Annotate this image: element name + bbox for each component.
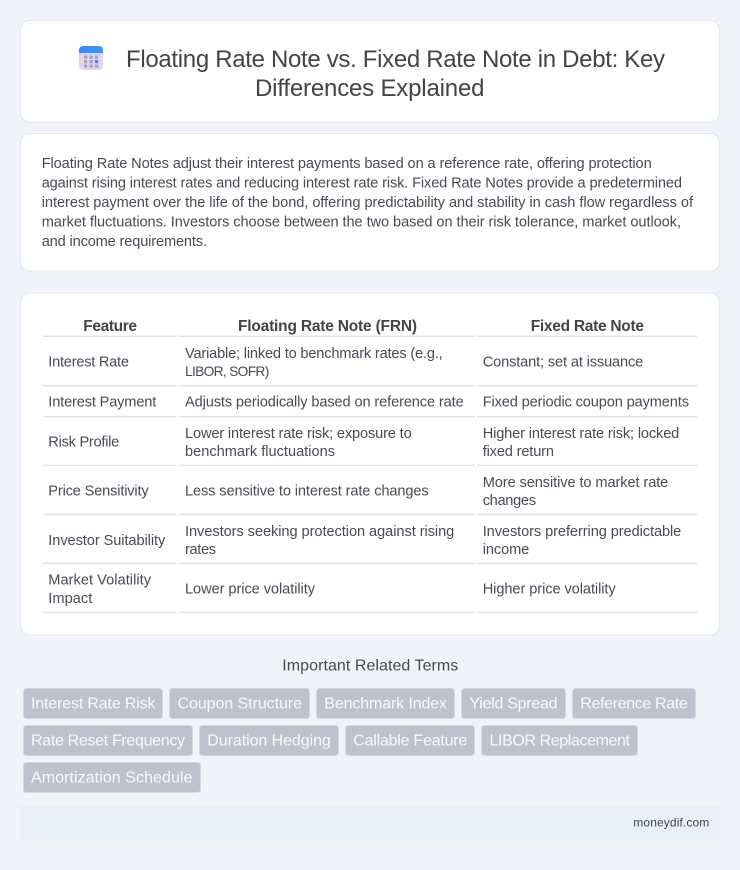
row: investor suitability: Investor Suitability: [48, 533, 166, 549]
row: interest rate: LIBOR, SOFR): [185, 364, 269, 379]
title: [126, 46, 665, 102]
footer source text: moneydif.com: [633, 816, 709, 830]
tag: reference rate: [572, 688, 696, 718]
row: price sensitivity: More sensitive to market rate: [483, 475, 668, 491]
icon: calendar: [79, 46, 103, 70]
panel: title header: [20, 20, 720, 122]
row: interest rate: Constant; set at issuance: [483, 355, 643, 371]
tag: yield spread: [462, 688, 566, 718]
tag: reference rate: Reference Rate: [580, 696, 688, 713]
footer bar: [20, 806, 720, 840]
tag: coupon structure: [170, 688, 310, 718]
tag: benchmark index: Benchmark Index: [324, 696, 447, 713]
row: interest payment: Interest Payment: [48, 395, 156, 411]
row: price sensitivity: [48, 475, 668, 509]
row: interest rate: Interest Rate: [48, 355, 129, 371]
tag: rate reset frequency: [24, 726, 192, 756]
row: market volatility impact: Lower price volatility: [185, 582, 316, 598]
row: investor suitability: Investors seeking protection against rising: [185, 524, 454, 540]
row: risk profile: Lower interest rate risk; exposure to: [185, 426, 412, 442]
title: Floating Rate Note vs. Fixed Rate Note in Debt: Key: [126, 46, 665, 73]
tag: libor replacement: LIBOR Replacement: [490, 733, 631, 750]
row: market volatility impact: Higher price volatility: [483, 582, 616, 598]
row: investor suitability: rates: [185, 542, 216, 558]
row: interest rate: Variable; linked to benchmark rates (e.g.,: [185, 346, 443, 362]
row: price sensitivity: Less sensitive to interest rate changes: [185, 484, 429, 500]
row: risk profile: Risk Profile: [48, 435, 119, 451]
row: interest payment: Fixed periodic coupon payments: [483, 395, 689, 411]
tag: benchmark index: [316, 688, 454, 718]
table header row: Fixed Rate Note: [531, 318, 644, 335]
intro text block: Floating Rate Notes adjust their interest payments based on a reference rate, offering protection: [42, 156, 652, 172]
tag: yield spread: Yield Spread: [470, 696, 558, 713]
related terms tags: [24, 688, 696, 792]
tag: amortization schedule: Amortization Schedule: [31, 770, 193, 787]
panel: introduction: [20, 134, 720, 271]
row: market volatility impact: Impact: [48, 591, 92, 607]
row: interest rate: [48, 346, 643, 379]
row: market volatility impact: [48, 573, 616, 607]
tag: rate reset frequency: Rate Reset Frequency: [31, 733, 185, 750]
intro text block: [42, 156, 694, 250]
tag: callable feature: [346, 726, 474, 756]
heading: important related terms: Important Related Terms: [282, 658, 458, 675]
row: interest payment: Adjusts periodically based on reference rate: [185, 395, 464, 411]
tag: interest rate risk: [24, 688, 162, 718]
table header row: Feature: [83, 318, 137, 335]
row: risk profile: Higher interest rate risk; locked: [483, 426, 679, 442]
tag: duration hedging: [200, 726, 338, 756]
row: risk profile: fixed return: [483, 444, 554, 460]
row: price sensitivity: Price Sensitivity: [48, 484, 149, 500]
row: risk profile: [48, 426, 679, 460]
intro text block: market fluctuations. Investors choose between the two based on their risk tolerance, market outlook,: [42, 214, 681, 230]
tag: libor replacement: [482, 726, 638, 756]
intro text block: and income requirements.: [42, 234, 207, 250]
row: investor suitability: [48, 524, 681, 558]
row: risk profile: benchmark fluctuations: [185, 444, 335, 460]
row: price sensitivity: changes: [483, 493, 536, 509]
table header row: [83, 318, 644, 335]
tag: callable feature: Callable Feature: [353, 733, 467, 750]
intro text block: interest payment over the life of the bond, offering predictability and stability in cash flow regardless of: [42, 195, 694, 211]
intro text block: against rising interest rates and reducing interest rate risk. Fixed Rate Notes provide a predetermined: [42, 175, 682, 191]
title: Differences Explained: [255, 75, 484, 102]
tag: amortization schedule: [24, 762, 200, 792]
tag: coupon structure: Coupon Structure: [178, 696, 302, 713]
row: market volatility impact: Market Volatility: [48, 573, 152, 589]
tag: duration hedging: Duration Hedging: [207, 733, 331, 750]
table header row: Floating Rate Note (FRN): [238, 318, 417, 335]
row: investor suitability: income: [483, 542, 529, 558]
row: interest payment: [48, 395, 689, 411]
row: investor suitability: Investors preferring predictable: [483, 524, 681, 540]
panel: comparison table: [20, 293, 720, 635]
tag: interest rate risk: Interest Rate Risk: [31, 696, 156, 713]
